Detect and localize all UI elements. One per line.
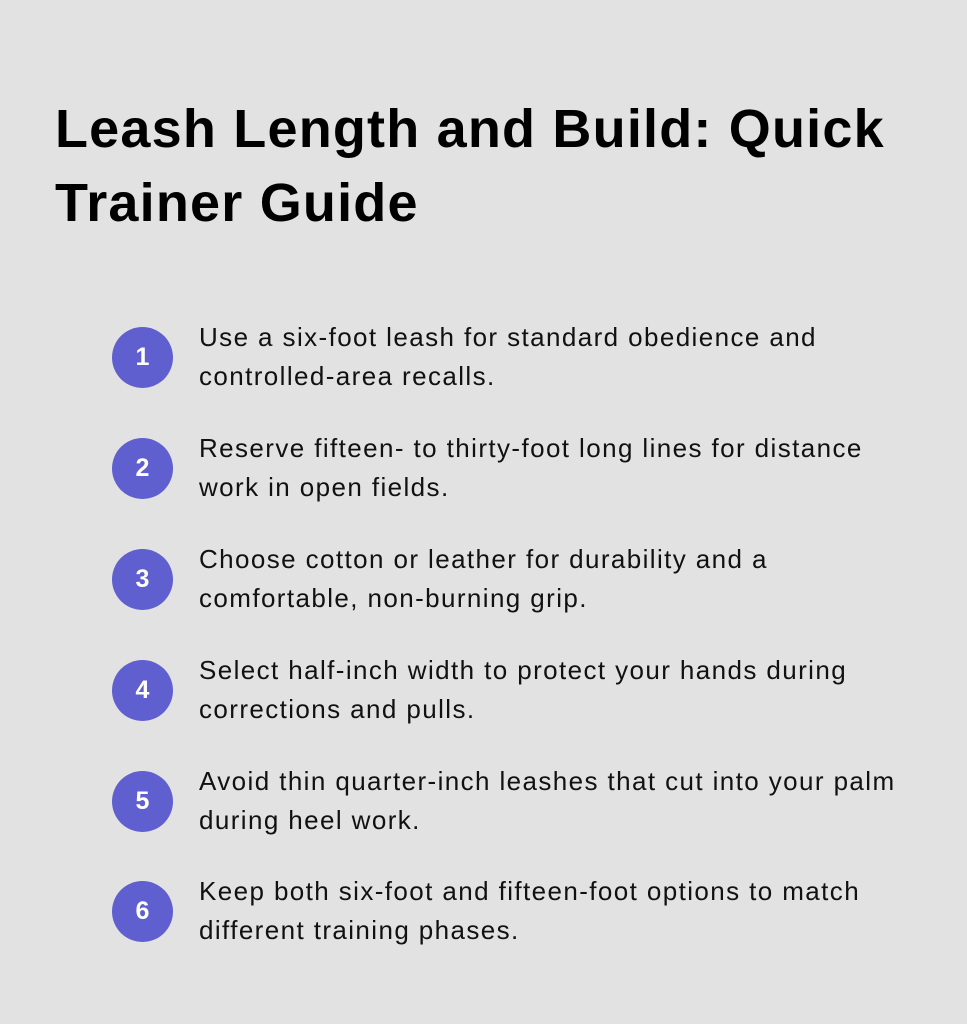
badge 4: 4 (136, 676, 149, 704)
badge 6 (112, 881, 173, 942)
title: Leash Length and Build: Quick (55, 99, 885, 159)
item 5 (112, 766, 896, 835)
badge 2: 2 (136, 454, 149, 482)
text 4: Select half-inch width to protect your hands during (199, 655, 847, 685)
text 4 (199, 655, 847, 724)
item 6 (112, 876, 860, 945)
text 3: Choose cotton or leather for durability and a (199, 544, 768, 574)
badge 2 (112, 438, 173, 499)
text 1: controlled-area recalls. (199, 361, 496, 391)
text 6: Keep both six-foot and fifteen-foot options to match (199, 876, 860, 906)
badge 6: 6 (136, 897, 149, 925)
badge 1 (112, 327, 173, 388)
text 6: different training phases. (199, 915, 520, 945)
text 5 (199, 766, 896, 835)
text 2: work in open fields. (199, 472, 450, 502)
text 1: Use a six-foot leash for standard obedience and (199, 322, 817, 352)
item 2 (112, 433, 863, 502)
badge 3: 3 (136, 565, 149, 593)
badge 5: 5 (136, 787, 149, 815)
item 1 (112, 322, 817, 391)
item 3 (112, 544, 768, 613)
text 1 (199, 322, 817, 391)
title (55, 99, 885, 233)
text 4: corrections and pulls. (199, 694, 475, 724)
text 3 (199, 544, 768, 613)
badge 5 (112, 771, 173, 832)
text 2 (199, 433, 863, 502)
text 2: Reserve fifteen- to thirty-foot long lines for distance (199, 433, 863, 463)
title: Trainer Guide (55, 173, 419, 233)
text 6 (199, 876, 860, 945)
text 5: during heel work. (199, 805, 421, 835)
item 4 (112, 655, 847, 724)
badge 4 (112, 660, 173, 721)
badge 1: 1 (136, 343, 149, 371)
badge 3 (112, 549, 173, 610)
text 3: comfortable, non-burning grip. (199, 583, 588, 613)
text 5: Avoid thin quarter-inch leashes that cut into your palm (199, 766, 896, 796)
